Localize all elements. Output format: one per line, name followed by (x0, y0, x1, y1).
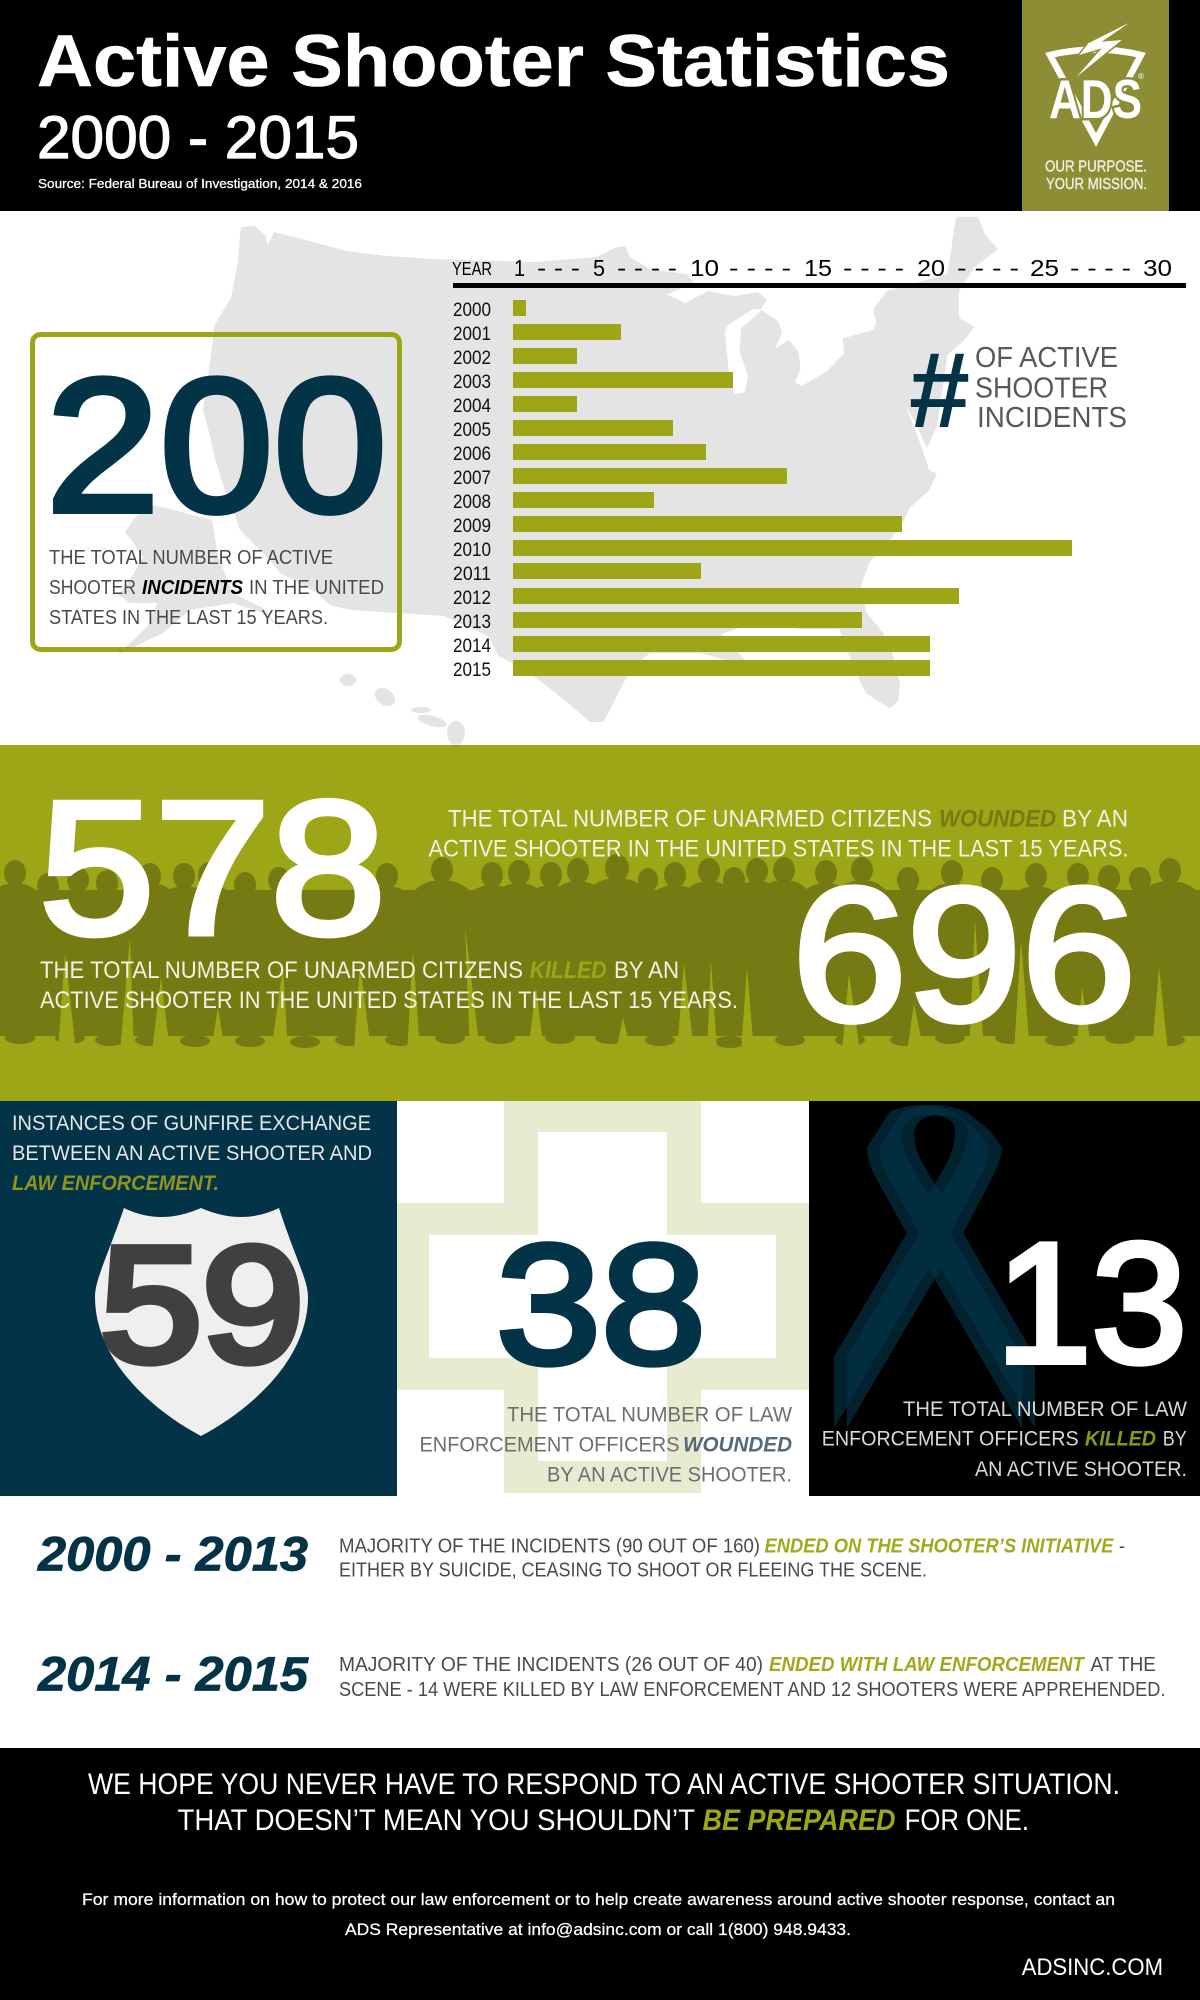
killed description: BY AN (614, 957, 679, 984)
logo tagline: OUR PURPOSE. (1045, 159, 1147, 176)
bar chart: incidents per year (452, 255, 1186, 681)
description (420, 1404, 792, 1487)
icon: triangle and lightning (1050, 23, 1141, 140)
contact information (82, 1890, 1115, 1939)
description (49, 546, 384, 629)
panel: how incidents ended 2000-2013 (37, 1529, 1125, 1582)
text block: AT THE (1090, 1653, 1156, 1676)
chart year labels: 2009 (453, 516, 491, 537)
chart year labels: 2006 (453, 444, 491, 465)
description: BY (1163, 1428, 1187, 1451)
big number 13: 13 (996, 1208, 1187, 1399)
icon: medical cross (397, 1101, 809, 1493)
description: IN THE UNITED (249, 576, 384, 599)
closing statement: BE PREPARED (702, 1804, 896, 1837)
big number 59: 59 (100, 1213, 304, 1396)
chart axis header: - - - - (1070, 255, 1131, 281)
chart axis header: 30 (1143, 255, 1172, 281)
footer band (0, 1748, 1200, 2000)
panel: gunfire exchanges (0, 1101, 397, 1496)
chart year labels: 2012 (453, 588, 491, 609)
chart year labels: 2001 (453, 324, 491, 345)
chart year labels (453, 300, 491, 681)
description: BY AN ACTIVE SHOOTER. (547, 1464, 792, 1487)
chart year labels: 2002 (453, 348, 491, 369)
chart axis header: 25 (1030, 255, 1059, 281)
chart year labels: 2011 (453, 564, 491, 585)
text block: EITHER BY SUICIDE, CEASING TO SHOOT OR FLEEING THE SCENE. (339, 1559, 927, 1582)
source line: Source: Federal Bureau of Investigation, 2014 & 2016 (38, 176, 362, 191)
description: KILLED (1085, 1428, 1156, 1451)
icon: interstate shield (95, 1208, 308, 1436)
chart axis header: - - - (537, 255, 580, 281)
killed description: ACTIVE SHOOTER IN THE UNITED STATES IN THE LAST 15 YEARS. (40, 987, 738, 1014)
big number 578: 578 (39, 762, 386, 974)
chart year labels: 2015 (453, 660, 491, 681)
killed description: KILLED (530, 957, 607, 984)
background map: United States silhouette (117, 217, 998, 745)
chart year labels: 2003 (453, 372, 491, 393)
chart axis header: 5 (593, 255, 605, 281)
legend text (975, 342, 1127, 434)
panel: citizens killed and wounded (0, 745, 1200, 1101)
description: THE TOTAL NUMBER OF LAW (903, 1398, 1187, 1421)
chart axis header: - - - - (729, 255, 791, 281)
description: STATES IN THE LAST 15 YEARS. (49, 606, 328, 629)
title: Active Shooter Statistics (37, 21, 950, 102)
text block: MAJORITY OF THE INCIDENTS (26 OUT OF 40) (339, 1653, 763, 1676)
chart axis header (452, 255, 1186, 288)
legend text: SHOOTER (975, 372, 1108, 404)
panel: officers killed (809, 1101, 1200, 1496)
logo wordmark: ADS (1049, 68, 1142, 130)
text block (339, 1653, 1166, 1701)
logo tagline (1045, 159, 1147, 193)
period heading: 2000 - 2013 (37, 1529, 308, 1582)
description: WOUNDED (683, 1434, 792, 1457)
description: AN ACTIVE SHOOTER. (975, 1458, 1187, 1481)
chart axis header: - - - - (843, 255, 904, 281)
chart axis header: 20 (917, 255, 945, 281)
panel: officers wounded (397, 1101, 809, 1496)
text block: MAJORITY OF THE INCIDENTS (90 OUT OF 160) (339, 1535, 760, 1558)
wounded description: WOUNDED (939, 806, 1056, 833)
description: INCIDENTS (142, 576, 243, 599)
chart year labels: 2000 (453, 300, 491, 321)
chart axis header: 10 (690, 255, 719, 281)
chart axis header: - - - - (957, 255, 1019, 281)
wounded description: THE TOTAL NUMBER OF UNARMED CITIZENS (448, 806, 932, 833)
panel: how incidents ended 2014-2015 (37, 1649, 1166, 1702)
text block: ENDED WITH LAW ENFORCEMENT (769, 1653, 1085, 1676)
chart year labels: 2008 (453, 492, 491, 513)
text block: - (1119, 1535, 1125, 1558)
contact information: ADS Representative at info@adsinc.com or call 1(800) 948.9433. (345, 1920, 851, 1939)
chart year labels: 2014 (453, 636, 491, 657)
description: THE TOTAL NUMBER OF ACTIVE (49, 546, 333, 569)
big number 200: 200 (46, 340, 387, 552)
closing statement: THAT DOESN’T MEAN YOU SHOULDN’T (178, 1804, 695, 1837)
website: ADSINC.COM (1022, 1954, 1163, 1981)
closing statement: FOR ONE. (905, 1804, 1029, 1837)
big number 696: 696 (792, 849, 1136, 1061)
panel: 200 total incidents (32, 334, 400, 650)
description (822, 1398, 1187, 1481)
wounded description: BY AN (1062, 806, 1128, 833)
chart axis header: - - - - (617, 255, 677, 281)
crowd silhouette (0, 854, 1200, 1052)
chart year labels: 2010 (453, 540, 491, 561)
legend text: INCIDENTS (977, 402, 1127, 434)
chart year labels: 2007 (453, 468, 491, 489)
description: ENFORCEMENT OFFICERS (420, 1434, 680, 1457)
chart year labels: 2013 (453, 612, 491, 633)
logo registered mark: ® (1138, 72, 1144, 81)
legend text: OF ACTIVE (975, 342, 1118, 374)
chart legend: number of active shooter incidents (909, 329, 1127, 450)
killed description (40, 957, 738, 1014)
description: ENFORCEMENT OFFICERS (822, 1428, 1079, 1451)
wounded description: ACTIVE SHOOTER IN THE UNITED STATES IN THE LAST 15 YEARS. (428, 836, 1128, 863)
chart axis header: YEAR (452, 259, 492, 279)
chart year labels: 2005 (453, 420, 491, 441)
logo tagline: YOUR MISSION. (1046, 176, 1147, 193)
text block (339, 1535, 1125, 1582)
text block: ENDED ON THE SHOOTER’S INITIATIVE (764, 1535, 1115, 1558)
description: SHOOTER (49, 576, 136, 599)
description: THE TOTAL NUMBER OF LAW (507, 1404, 792, 1427)
chart bars (513, 300, 1072, 676)
hash symbol: # (909, 329, 970, 450)
chart axis header: 1 (514, 255, 525, 281)
description: LAW ENFORCEMENT. (12, 1172, 219, 1195)
big number 38: 38 (496, 1210, 706, 1400)
description: INSTANCES OF GUNFIRE EXCHANGE (12, 1112, 371, 1135)
logo panel: ADS (1022, 0, 1169, 211)
wounded description (428, 806, 1128, 863)
period heading: 2014 - 2015 (37, 1649, 309, 1702)
closing statement (88, 1768, 1120, 1837)
description: BETWEEN AN ACTIVE SHOOTER AND (12, 1142, 372, 1165)
icon: awareness ribbon (834, 1105, 1035, 1428)
subtitle: year range: 2000 - 2015 (37, 104, 359, 171)
killed description: THE TOTAL NUMBER OF UNARMED CITIZENS (40, 957, 523, 984)
description (12, 1112, 372, 1195)
chart axis header: 15 (804, 255, 832, 281)
chart year labels: 2004 (453, 396, 491, 417)
contact information: For more information on how to protect our law enforcement or to help create awareness around active shooter response, contact an (82, 1890, 1115, 1909)
header band (0, 0, 1200, 211)
